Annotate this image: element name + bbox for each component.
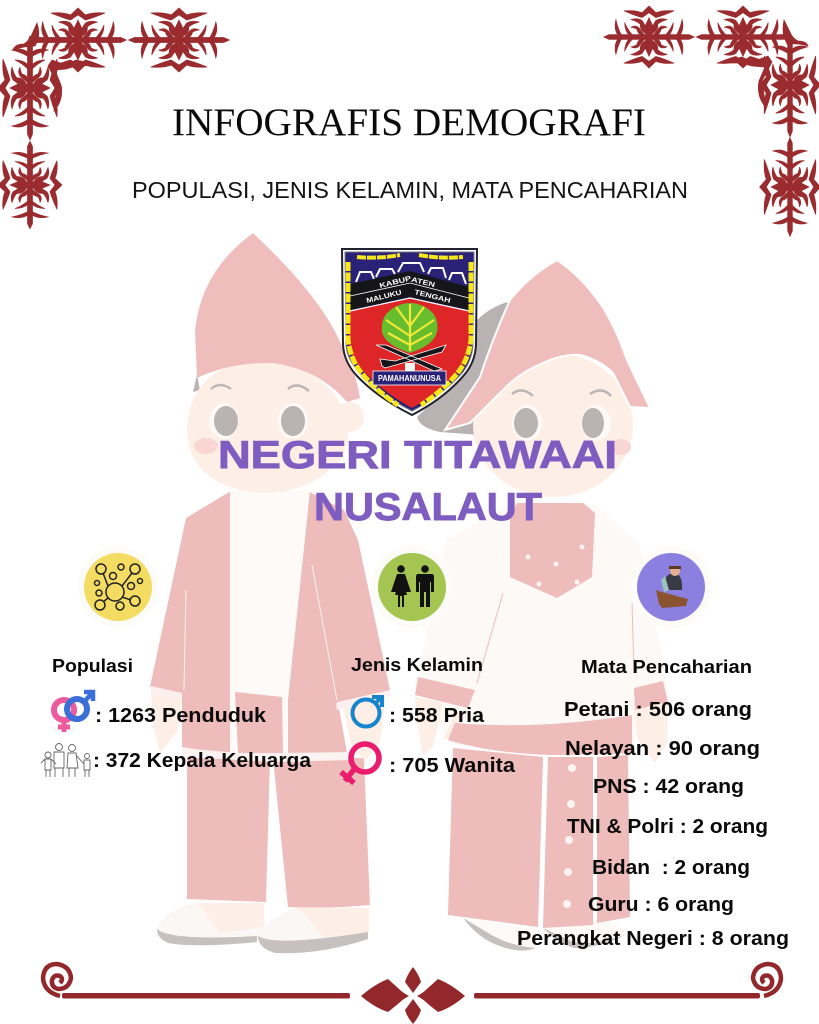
crest: fortress wall [356, 263, 466, 284]
boy: hat [195, 233, 360, 402]
boy: hair [193, 375, 338, 420]
crest: banner text: MALUKU [366, 289, 402, 305]
icon: family line drawing [41, 744, 90, 777]
crest: banner text: KABUPATEN [380, 276, 435, 288]
boy: jacket seams [184, 565, 337, 700]
boy: head [187, 362, 348, 493]
boy: shirt [230, 491, 310, 755]
list item: farmers: Petani : 506 orang [564, 698, 752, 721]
crest: black banners [350, 271, 469, 298]
footer: left spiral [43, 964, 71, 996]
footer: left bar [62, 993, 350, 998]
label: Jenis Kelamin heading: Jenis Kelamin [351, 654, 483, 675]
girl: hair [417, 302, 520, 435]
crest: crossed machetes [376, 345, 446, 371]
list: livelihoods [517, 698, 789, 950]
text: female count: : 705 Wanita [389, 754, 516, 777]
list item: midwives: Bidan : 2 orang [592, 856, 750, 879]
heading: negeri name line 2: NUSALAUT [314, 486, 542, 529]
icon: combined gender symbols [54, 692, 93, 732]
crest: green sago leaf [382, 303, 438, 353]
corner ornament: top right [604, 6, 819, 236]
girl: cuffs [415, 677, 475, 708]
text: male count: : 558 Pria [389, 704, 485, 727]
girl: collar with dots [510, 503, 595, 598]
girl: skirt panels [448, 748, 543, 927]
girl: shoes [463, 918, 627, 952]
crest: inner line [345, 252, 474, 411]
boy: shoes [157, 903, 264, 942]
icon: population network [78, 547, 158, 627]
boy: eyes [194, 385, 309, 454]
icon: gender figures [371, 546, 453, 628]
list item: military and police: TNI & Polri : 2 orang [567, 815, 768, 838]
list item: teachers: Guru : 6 orang [588, 893, 734, 916]
boy: shirt panel [235, 692, 283, 755]
icon: fisherman on boat [630, 546, 712, 628]
subtitle: POPULASI, JENIS KELAMIN, MATA PENCAHARIAN [132, 177, 688, 203]
crest: Kabupaten Maluku Tengah: PAMAHANUNUSA [378, 373, 441, 383]
crest: base pillars [405, 363, 415, 371]
heading: negeri name line 1: NEGERI TITAWAAI [218, 434, 617, 477]
footer: central diamond flower [361, 967, 465, 1024]
crest: outer shield [342, 249, 477, 415]
icon: female symbol [341, 744, 379, 783]
boy: jacket and sleeves [150, 491, 231, 755]
illustration: girl in traditional dress [415, 260, 668, 952]
label: Mata Pencaharian heading: Mata Pencaharian [581, 656, 752, 677]
crest: Kabupaten Maluku Tengah [341, 248, 478, 416]
illustration: boy in traditional dress [150, 233, 391, 953]
crest: banner text: TENGAH [414, 289, 451, 305]
footer: right spiral [753, 964, 781, 996]
girl: eyes [512, 390, 631, 455]
text: heads of household: : 372 Kepala Keluarga [93, 749, 312, 772]
list item: fishers: Nelayan : 90 orang [565, 737, 760, 760]
girl: hands [415, 697, 443, 755]
icon: male symbol [352, 697, 382, 726]
list item: village officials: Perangkat Negeri : 8 orang [517, 927, 789, 950]
crest: red field [349, 298, 470, 408]
footer: right bar [474, 993, 760, 998]
girl: skirt buttons [563, 764, 576, 908]
label: Populasi heading: Populasi [52, 655, 133, 676]
boy: hands [151, 692, 182, 753]
crest: motto ribbon [373, 371, 446, 385]
girl: sash [448, 715, 632, 755]
text: total population: : 1263 Penduduk [95, 704, 267, 727]
title: INFOGRAFIS DEMOGRAFI [172, 101, 646, 144]
girl: head [473, 353, 633, 497]
girl: hat [445, 260, 650, 430]
crest: banner text [366, 276, 451, 305]
boy: ear [334, 402, 364, 432]
footer ornament [43, 964, 781, 1024]
girl: blouse seams [477, 593, 634, 683]
boy: waist band [182, 748, 351, 762]
boy: legs [187, 758, 270, 902]
list item: civil servants: PNS : 42 orang [593, 775, 744, 798]
crest: yellow rope border [348, 262, 471, 405]
girl: blouse [417, 505, 667, 745]
corner ornament: top left [0, 8, 229, 229]
